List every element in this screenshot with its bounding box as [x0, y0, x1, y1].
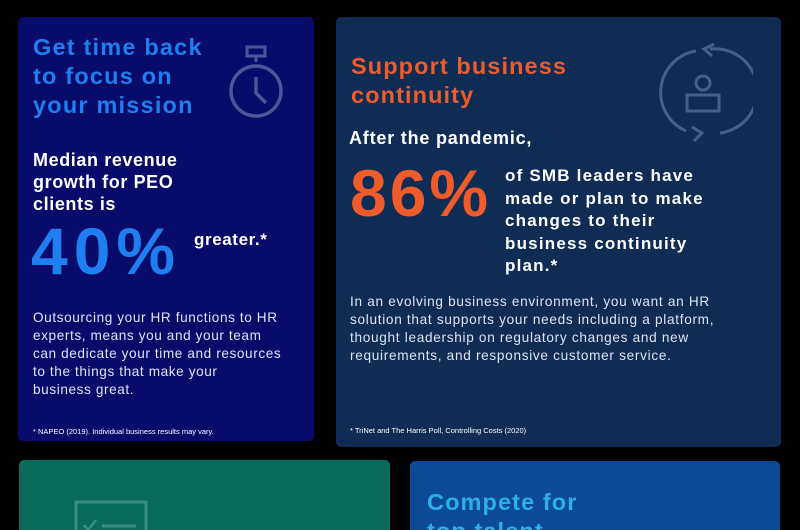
- text: median revenue: clients is: [33, 194, 116, 214]
- body text: solution that supports your needs including a platform,: [350, 312, 714, 327]
- body text: [350, 294, 714, 363]
- body text: [33, 310, 281, 397]
- body text: requirements, and responsive customer service.: [350, 348, 672, 363]
- heading: get time back: your mission: [33, 92, 194, 118]
- panel: green: [19, 460, 390, 530]
- body text: business great.: [33, 382, 134, 397]
- heading: get time back: Get time back: [33, 34, 203, 60]
- heading: compete for top talent: Compete for: [427, 489, 578, 515]
- body text: can dedicate your time and resources: [33, 346, 281, 361]
- panel: business continuity: [336, 17, 781, 447]
- panel: compete for top talent: [410, 461, 780, 530]
- body text: Outsourcing your HR functions to HR: [33, 310, 278, 325]
- text: median revenue: growth for PEO: [33, 172, 173, 192]
- text: SMB leaders: plan.*: [505, 256, 558, 275]
- text: median revenue: Median revenue: [33, 150, 177, 170]
- icon: continuity cycle: [659, 43, 753, 142]
- icon: checklist: [74, 500, 148, 530]
- body text: to the things that make your: [33, 364, 218, 379]
- text: median revenue: [33, 150, 177, 214]
- stat: 40%: 40%: [31, 214, 181, 288]
- text: greater: greater.*: [194, 230, 267, 249]
- stat: 86%: 86%: [350, 156, 491, 230]
- footnote: * TriNet and The Harris Poll, Controlling Costs (2020): [350, 426, 526, 435]
- footnote: * NAPEO (2019). Individual business results may vary.: [33, 427, 214, 436]
- text: SMB leaders: made or plan to make: [505, 188, 704, 208]
- heading: get time back: to focus on: [33, 63, 173, 89]
- text: after the pandemic: After the pandemic,: [349, 128, 532, 148]
- icon: stopwatch: [229, 46, 283, 118]
- text: SMB leaders: business continuity: [505, 234, 687, 252]
- panel: get time back: [18, 17, 314, 441]
- heading: get time back: [33, 34, 203, 118]
- body text: experts, means you and your team: [33, 328, 262, 343]
- heading: support business continuity: [351, 53, 567, 108]
- heading: support business continuity: Support business: [351, 53, 567, 79]
- body text: thought leadership on regulatory changes and new: [350, 330, 689, 345]
- text: SMB leaders: changes to their: [505, 211, 656, 230]
- text: SMB leaders: of SMB leaders have: [505, 166, 694, 185]
- text: SMB leaders: [505, 166, 704, 275]
- heading: compete for top talent: [427, 489, 578, 530]
- body text: In an evolving business environment, you want an HR: [350, 294, 710, 309]
- heading: support business continuity: continuity: [351, 82, 474, 108]
